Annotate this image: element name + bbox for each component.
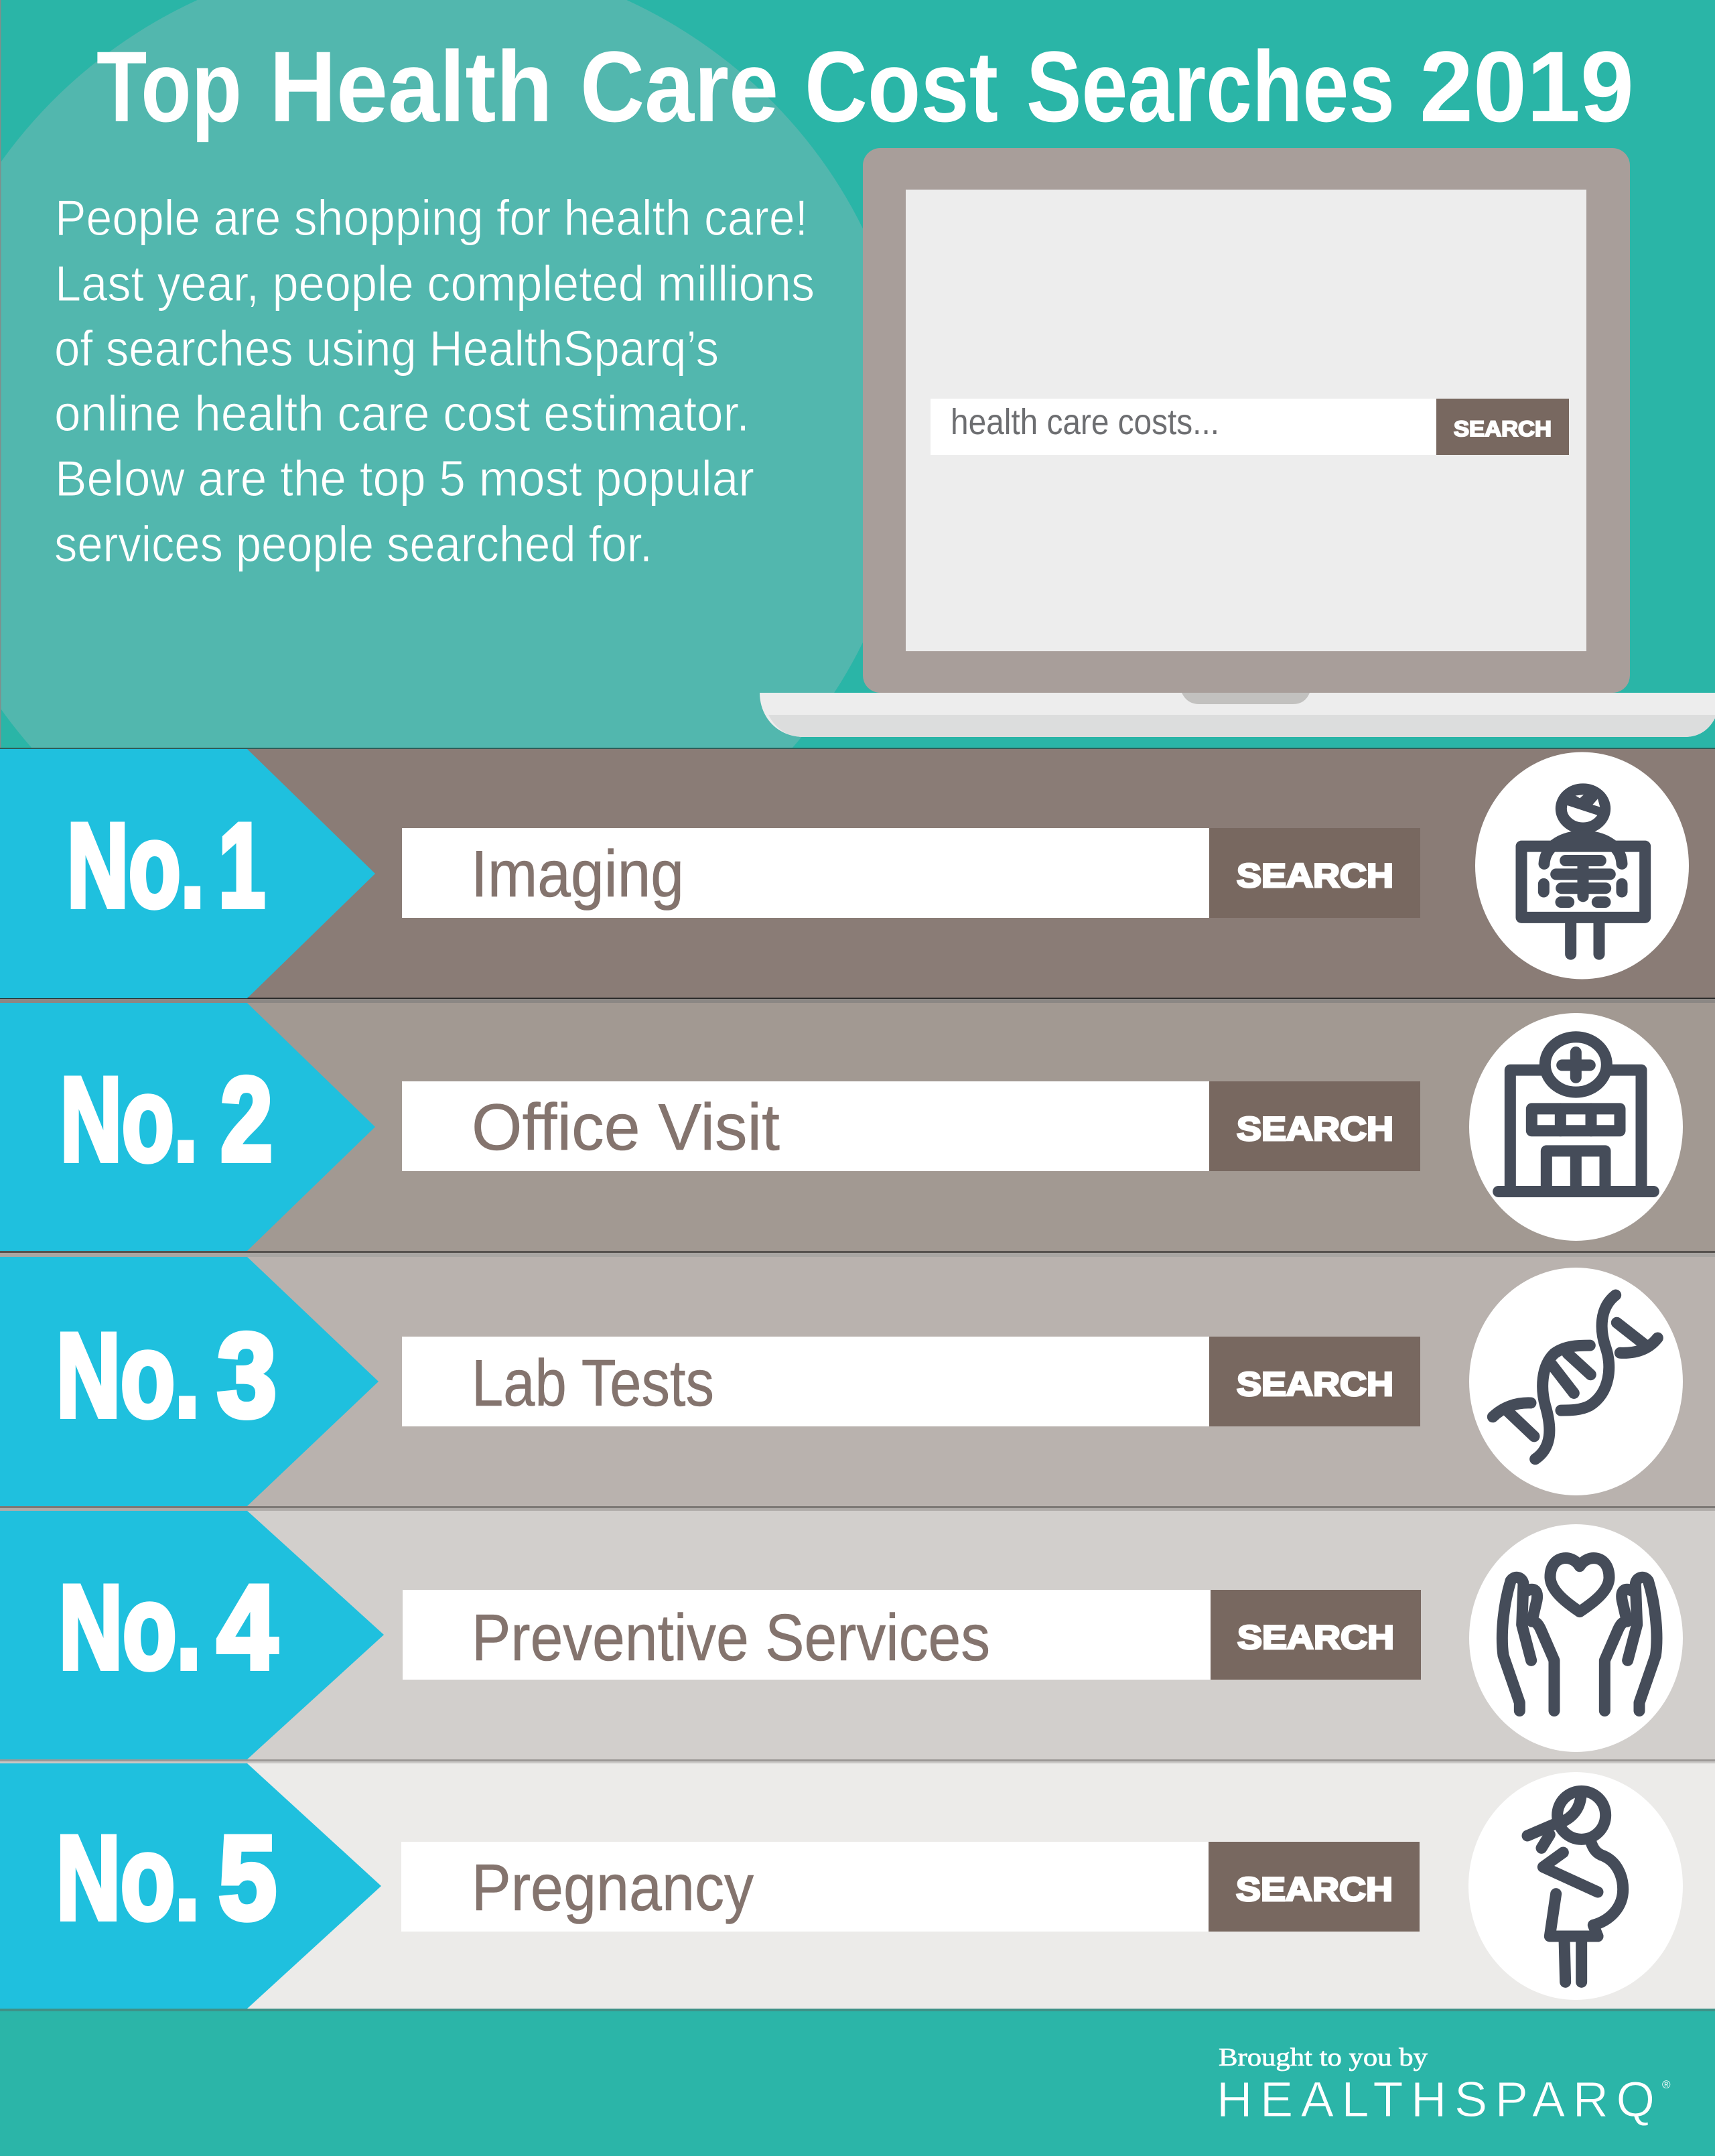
title: Searches [1026, 30, 1395, 143]
rank number 4: No. [59, 1560, 201, 1694]
row 5: Pregnancy [0, 1763, 1715, 2009]
search box 1 [402, 828, 1209, 918]
search button 3: SEARCH [1237, 1365, 1393, 1403]
search button 2 [1209, 1081, 1420, 1171]
row 3: Lab Tests [0, 1257, 1715, 1506]
panel: footer [0, 2009, 1715, 2156]
icon: hands holding heart [1469, 1524, 1683, 1752]
laptop base shadow [768, 715, 1715, 737]
search box 3 [402, 1337, 1209, 1426]
search button 5 [1209, 1842, 1420, 1932]
rank number 4: 4 [217, 1560, 277, 1694]
search label 1: Imaging [471, 837, 684, 911]
credit line: Brought to you by [1219, 2043, 1428, 2072]
rank number 3: 3 [217, 1308, 277, 1442]
search field [931, 399, 1569, 455]
search box 2 [402, 1081, 1209, 1171]
registered mark: ® [1662, 2078, 1671, 2091]
laptop screen [906, 190, 1586, 651]
laptop illustration [760, 148, 1715, 737]
laptop base [760, 693, 1715, 737]
title: 2019 [1420, 30, 1634, 143]
rank number 1: No. [67, 799, 204, 932]
intro text block: online health care cost estimator. [54, 385, 750, 442]
search button 4: SEARCH [1237, 1619, 1394, 1656]
rank chevron 3 [0, 1257, 379, 1506]
search field: SEARCH [1454, 417, 1552, 441]
row dividers and shadows [0, 748, 1715, 1763]
title: Top [96, 30, 242, 143]
title: Cost [805, 30, 998, 143]
intro text block: Below are the top 5 most popular [55, 450, 754, 507]
rank number 2: No. [60, 1053, 198, 1186]
search button 2: SEARCH [1237, 1110, 1393, 1148]
rank number 3: No. [56, 1308, 200, 1442]
intro text block: Last year, people completed millions [55, 255, 815, 312]
search box 4 [403, 1590, 1211, 1680]
rank chevron 2 [0, 1003, 375, 1251]
rank number 2: 2 [220, 1053, 273, 1186]
HealthSparq logo wordmark: HEALTHSPARQ [1217, 2072, 1655, 2127]
icon: x-ray [1475, 752, 1689, 980]
row 2: Office Visit [0, 1003, 1715, 1251]
intro text block [54, 190, 815, 572]
laptop notch [1182, 693, 1310, 704]
rank chevron 5 [0, 1763, 381, 2009]
title: Health [269, 30, 553, 143]
search label 4: Preventive Services [472, 1601, 990, 1674]
search label 3: Lab Tests [472, 1346, 714, 1420]
search label 5: Pregnancy [472, 1850, 754, 1924]
search button 5: SEARCH [1236, 1871, 1393, 1908]
search button 3 [1209, 1337, 1420, 1426]
rank chevron 4 [0, 1511, 384, 1759]
intro text block: People are shopping for health care! [55, 190, 808, 246]
icon: dna [1469, 1268, 1683, 1495]
search button 4 [1211, 1590, 1421, 1680]
row 4: Preventive Services [0, 1511, 1715, 1759]
search label 2: Office Visit [472, 1090, 780, 1164]
title: Care [580, 30, 778, 143]
search field: health care costs... [951, 402, 1219, 442]
title [96, 30, 1634, 143]
row 1: Imaging [0, 749, 1715, 998]
rank chevron 1 [0, 749, 375, 998]
search button 1 [1209, 828, 1420, 918]
rank number 5: No. [56, 1811, 200, 1944]
search button 1: SEARCH [1237, 857, 1393, 894]
rank number 1: 1 [218, 799, 265, 932]
rank number 5: 5 [218, 1811, 277, 1944]
panel: header background [0, 0, 863, 748]
icon: pregnant person [1468, 1772, 1683, 2000]
search box 5 [401, 1842, 1209, 1932]
intro text block: of searches using HealthSparq’s [54, 320, 719, 377]
icon: hospital [1469, 1013, 1683, 1241]
intro text block: services people searched for. [54, 516, 653, 572]
laptop lid [863, 148, 1630, 693]
